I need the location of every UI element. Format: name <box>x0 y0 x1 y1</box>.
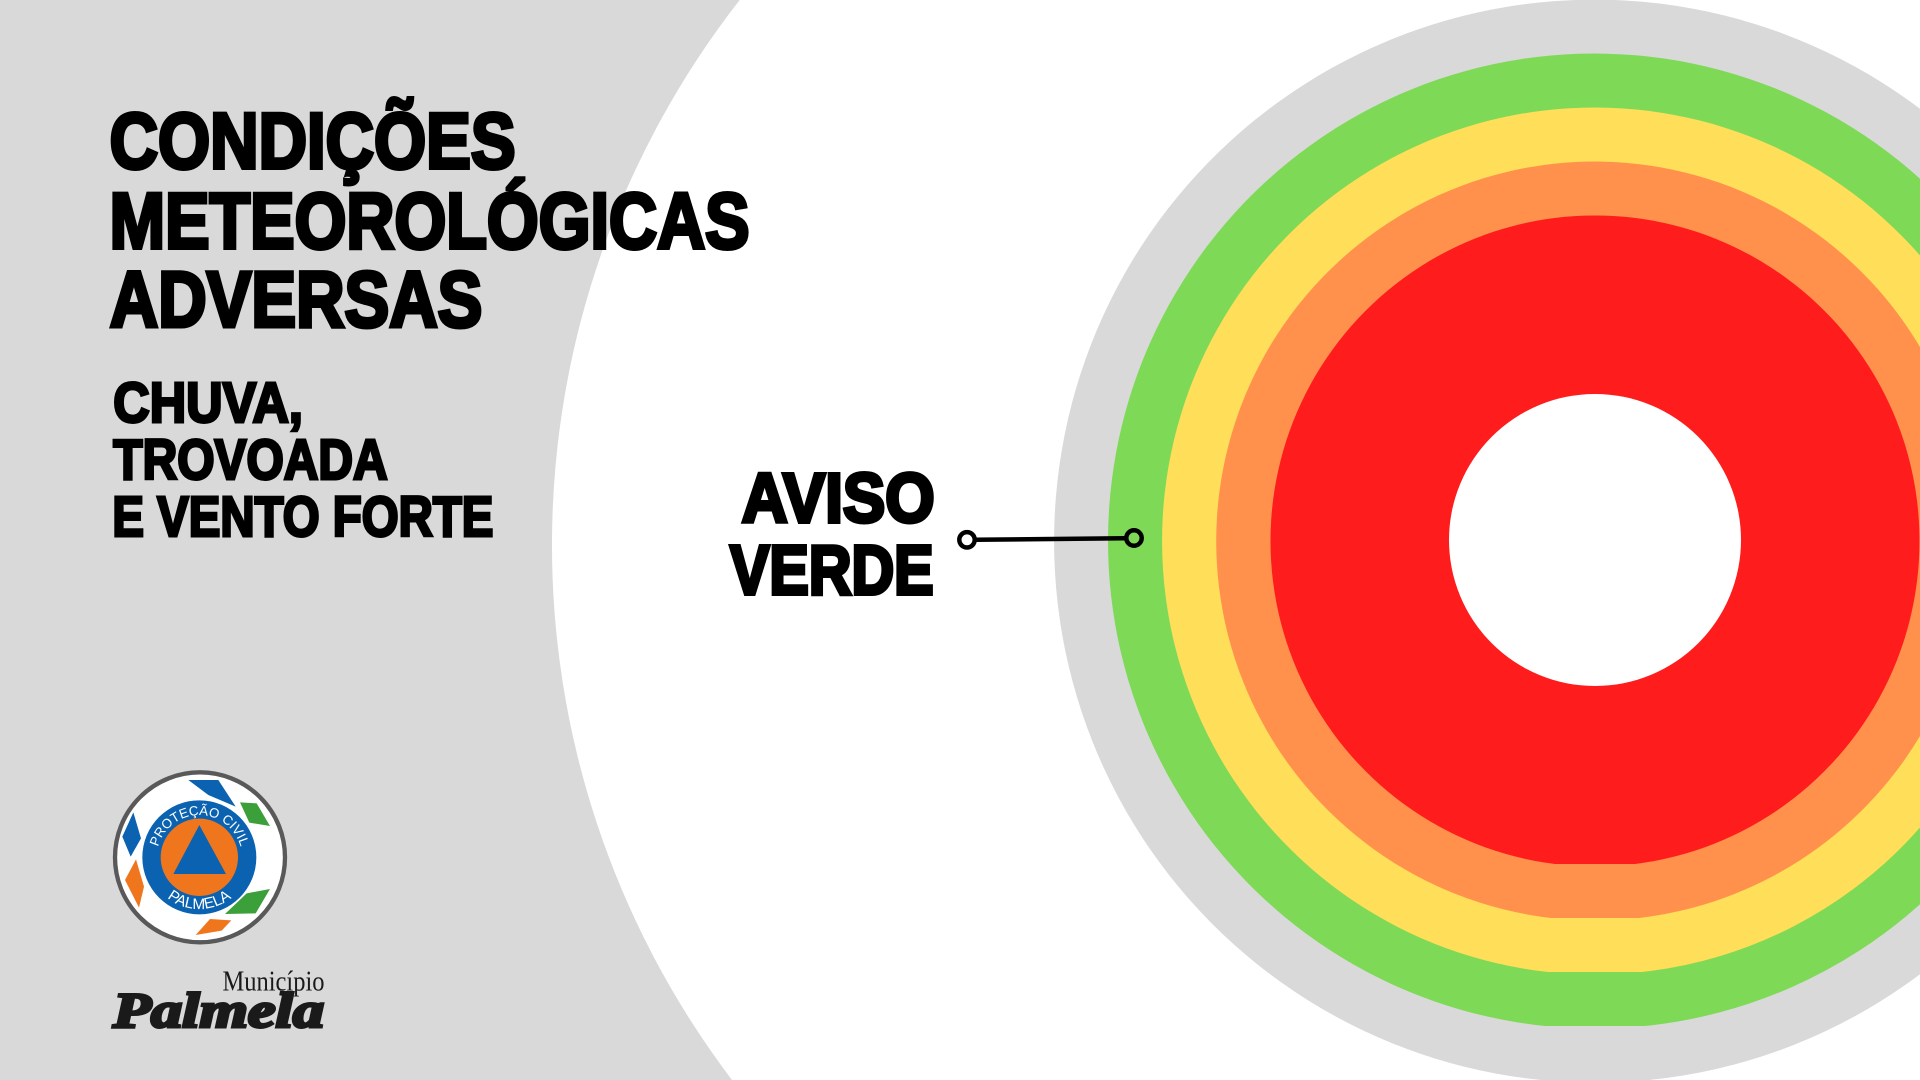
title <box>110 96 750 344</box>
label: aviso verde: VERDE <box>730 531 934 609</box>
label: aviso verde <box>730 459 935 609</box>
subtitle: CHUVA, <box>113 371 303 435</box>
panel: white arc area <box>552 0 800 1080</box>
subtitle: E VENTO FORTE <box>112 485 493 549</box>
panel: grey background <box>0 0 800 1080</box>
logo: Proteção Civil Palmela: PALMELA <box>168 890 232 910</box>
logo: Município de Palmela: Município <box>222 966 324 998</box>
callout line <box>959 530 1142 548</box>
logo: Proteção Civil Palmela <box>112 770 288 944</box>
subtitle <box>112 371 493 549</box>
logo: Proteção Civil Palmela: PROTEÇÃO CIVIL <box>150 804 248 846</box>
subtitle: TROVOADA <box>113 428 388 492</box>
title: ADVERSAS <box>110 254 482 344</box>
logo: Município de Palmela: Palmela <box>112 982 324 1038</box>
chart: concentric warning rings <box>1054 0 1920 1080</box>
logo: Município de Palmela <box>112 966 325 1038</box>
title: CONDIÇÕES <box>110 96 516 185</box>
title: METEOROLÓGICAS <box>110 176 750 265</box>
label: aviso verde: AVISO <box>742 459 935 537</box>
